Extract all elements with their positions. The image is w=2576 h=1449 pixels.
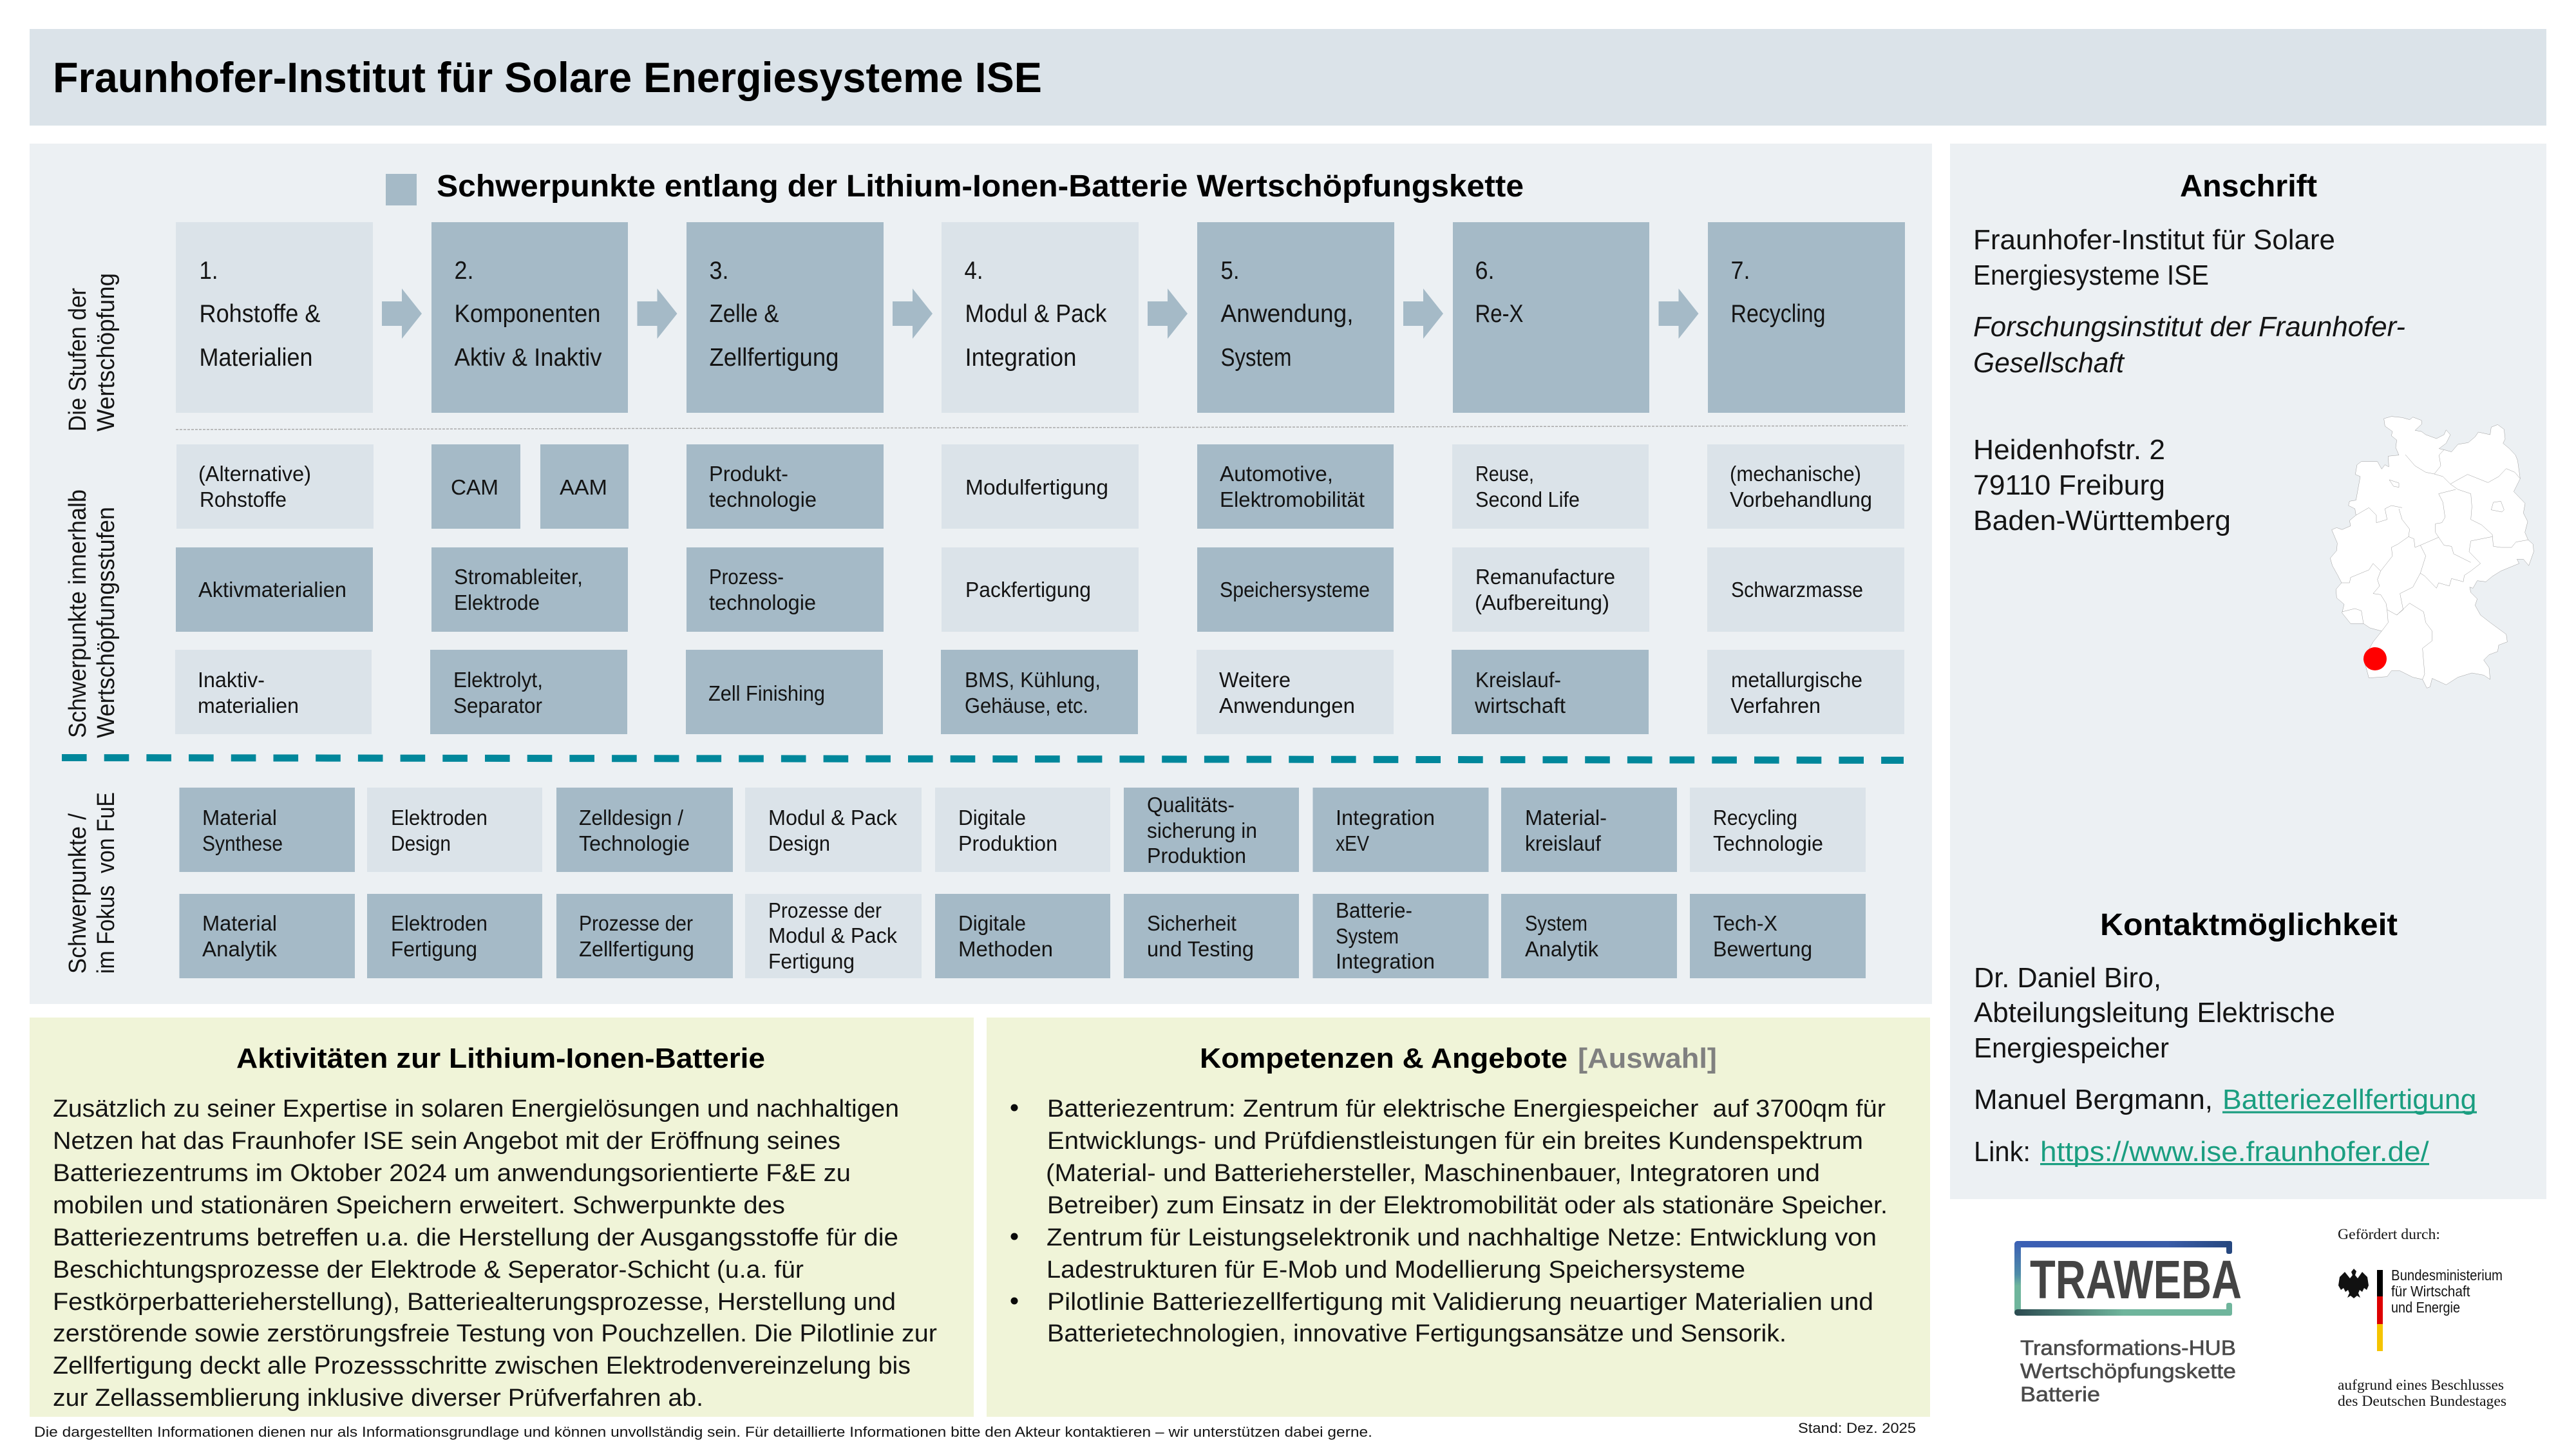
arrow 6 xyxy=(1659,289,1699,339)
row label: research focus: im Fokus von FuE xyxy=(93,792,120,974)
box: Speichersysteme xyxy=(1197,547,1394,632)
text block: second contact: Batteriezellfertigung xyxy=(2222,1084,2477,1115)
text block: institute description: Gesellschaft xyxy=(1973,347,2125,379)
arrow 5 xyxy=(1403,289,1443,339)
box: Materialkreislauf: kreislauf xyxy=(1525,831,1602,855)
heading: Kompetenzen: [Auswahl] xyxy=(1578,1043,1717,1074)
box: metallurgische Verfahren: Verfahren xyxy=(1730,694,1821,717)
logo: TRAWEBA xyxy=(2014,1241,2242,1406)
box: Digitale Produktion: Digitale xyxy=(958,806,1026,829)
box: Reuse: Second Life xyxy=(1475,488,1580,511)
box: Weitere Anwendungen xyxy=(1197,650,1394,734)
box: Materialkreislauf xyxy=(1501,788,1677,872)
box: Digitale Methoden xyxy=(935,894,1110,978)
logo: TRAWEBA: Wertschöpfungskette xyxy=(2020,1359,2236,1383)
stage 7: Recycling xyxy=(1731,300,1825,328)
flag bar xyxy=(2377,1270,2383,1351)
box: Material Synthese: Synthese xyxy=(202,831,283,855)
stage 1: Materialien xyxy=(200,344,313,372)
box: Kreislaufwirtschaft: wirtschaft xyxy=(1474,694,1566,717)
box: Zell Finishing: Zell Finishing xyxy=(708,681,825,705)
box: Inaktivmaterialien: materialien xyxy=(198,694,299,717)
box: Kreislaufwirtschaft: Kreislauf- xyxy=(1475,668,1561,692)
title banner xyxy=(30,29,2546,126)
heading: Aktivitäten: Aktivitäten zur Lithium-Ionen-Batterie xyxy=(236,1043,765,1074)
text block: Aktivitäten: zerstörende sowie zerstörungsfreie Testung von Pouchzellen. Die Pilotlinie zur xyxy=(53,1320,937,1347)
box: Stromableiter: Stromableiter, xyxy=(454,565,583,589)
box: Digitale Produktion xyxy=(935,788,1110,872)
box: Tech-X Bewertung: Tech-X xyxy=(1713,911,1777,935)
box: Batterie-System Integration: System xyxy=(1336,924,1399,948)
heading: Kontaktmöglichkeit: Kontaktmöglichkeit xyxy=(2100,908,2398,942)
box: Material Analytik: Material xyxy=(202,911,277,935)
box: Automotive: Elektromobilität xyxy=(1220,488,1365,511)
box: Produkttechnologie xyxy=(687,444,884,529)
box: BMS: BMS, Kühlung, xyxy=(965,668,1101,692)
logo: Bundesministerium: Gefördert durch: xyxy=(2338,1226,2440,1242)
text block: Aktivitäten: mobilen und stationären Speichern erweitert. Schwerpunkte des xyxy=(53,1192,785,1219)
text block: Aktivitäten: Batteriezentrums im Oktober 2024 um anwendungsorientierte F&E zu xyxy=(53,1160,851,1187)
stage 5: Anwendung, xyxy=(1221,300,1354,328)
panel heading: value chain: Schwerpunkte entlang der Lithium-Ionen-Batterie Wertschöpfungskette xyxy=(437,169,1524,204)
box: Kreislaufwirtschaft xyxy=(1452,650,1649,734)
row label: focus within stages: Wertschöpfungsstufen xyxy=(93,507,120,738)
box: Integration xEV: Integration xyxy=(1336,806,1435,829)
box: Zelldesign: Zelldesign / xyxy=(579,806,684,829)
logo: Bundesministerium: des Deutschen Bundestages xyxy=(2338,1393,2506,1409)
box: Sicherheit und Testing: und Testing xyxy=(1147,937,1254,961)
stage 3: Zellfertigung xyxy=(710,344,838,372)
box: Vorbehandlung: Vorbehandlung xyxy=(1730,488,1872,511)
panel: Kompetenzen xyxy=(987,1018,1930,1417)
box: Elektroden Design: Elektroden xyxy=(391,806,488,829)
stage 5: 5. xyxy=(1221,257,1239,285)
box: Elektroden Design xyxy=(367,788,542,872)
box: BMS: Gehäuse, etc. xyxy=(965,694,1088,717)
map: Germany with location marker xyxy=(2330,417,2533,688)
box: Automotive: Automotive, xyxy=(1220,462,1333,486)
text block: Aktivitäten: Batteriezentrums betreffen u.a. die Herstellung der Ausgangsstoffe für die xyxy=(53,1224,898,1251)
arrow 3 xyxy=(893,289,933,339)
box: Tech-X Bewertung xyxy=(1690,894,1866,978)
box: Prozesse Modul Pack: Modul & Pack xyxy=(768,923,897,947)
box: CAM: CAM xyxy=(451,475,498,499)
text block: Aktivitäten: Zellfertigung deckt alle Prozessschritte zwischen Elektrodenvereinzelung bis xyxy=(53,1352,911,1379)
text block: institute name xyxy=(1973,224,2335,291)
box: Integration xEV xyxy=(1312,788,1489,872)
box: Recycling Technologie xyxy=(1690,788,1866,872)
row label: stages: Die Stufen der xyxy=(64,288,91,431)
box: Zell Finishing xyxy=(686,650,883,734)
text block: Aktivitäten: zur Zellassemblierung inklusive diverser Prüfverfahren ab. xyxy=(53,1385,703,1412)
box: Elektroden Fertigung xyxy=(367,894,542,978)
box: Prozesstechnologie: technologie xyxy=(709,591,816,614)
stage 3: 3. xyxy=(710,257,729,285)
box: Modul Pack Design: Modul & Pack xyxy=(768,806,897,829)
box: AAM xyxy=(540,444,629,529)
box: Vorbehandlung: (mechanische) xyxy=(1730,462,1861,486)
box: Material Analytik xyxy=(179,894,355,978)
text block: contact person xyxy=(1974,962,2335,1064)
box: Prozesse Modul Pack xyxy=(745,894,922,978)
box: CAM xyxy=(431,444,520,529)
panel: Aktivitäten xyxy=(30,1018,974,1417)
heading: Kompetenzen: Kompetenzen & Angebote xyxy=(1200,1043,1567,1074)
box: Alternative Rohstoffe: Rohstoffe xyxy=(200,488,287,511)
box: Modul Pack Design xyxy=(745,788,922,872)
arrow 2 xyxy=(638,289,677,339)
box: Material Synthese: Material xyxy=(202,806,277,829)
box: Sicherheit und Testing: Sicherheit xyxy=(1147,911,1236,935)
box: Prozesse der Zellfertigung xyxy=(556,894,733,978)
heading: Kompetenzen xyxy=(1200,1043,1717,1074)
text block: link: https://www.ise.fraunhofer.de/ xyxy=(2040,1136,2429,1168)
box: Automotive xyxy=(1197,444,1394,529)
box: BMS xyxy=(941,650,1138,734)
box: Weitere Anwendungen: Weitere xyxy=(1219,668,1291,692)
row label: research focus xyxy=(64,792,120,974)
text block: contact person: Energiespeicher xyxy=(1974,1032,2169,1064)
box: Elektrolyt xyxy=(430,650,627,734)
row label: stages xyxy=(64,273,120,431)
box: Alternative Rohstoffe xyxy=(176,444,374,529)
logo: Bundesministerium: aufgrund eines Beschlusses xyxy=(2338,1377,2504,1393)
footnote: disclaimer: Die dargestellten Informationen dienen nur als Informationsgrundlage und können unvollständig sein. Für detaillierte Informationen bitte den Akteur kontaktieren – wir unterstützen dabei gerne. xyxy=(34,1424,1372,1440)
box: Zelldesign: Technologie xyxy=(579,831,690,855)
box: Prozesse Modul Pack: Prozesse der xyxy=(768,898,882,922)
bullet list: Kompetenzen: (Material- und Batteriehersteller, Maschinenbauer, Integratoren und xyxy=(1046,1160,1820,1187)
stage 2 xyxy=(431,222,628,413)
box: Inaktivmaterialien xyxy=(175,650,372,734)
text block: Aktivitäten: Festkörperbatterieherstellung), Batteriealterungsprozesse, Herstellung und xyxy=(53,1289,896,1316)
box: Sicherheit und Testing xyxy=(1124,894,1299,978)
box: Reuse: Reuse, xyxy=(1475,462,1534,486)
stage 2: Aktiv & Inaktiv xyxy=(455,344,602,372)
stage 1 xyxy=(176,222,373,413)
stage 4: 4. xyxy=(965,257,983,285)
box: Stromableiter: Elektrode xyxy=(454,591,540,614)
box: Reuse xyxy=(1452,444,1649,529)
box: Elektroden Design: Design xyxy=(391,831,451,855)
row label: focus within stages xyxy=(64,489,120,738)
stage 6: 6. xyxy=(1475,257,1494,285)
icon: federal eagle xyxy=(2338,1269,2369,1298)
bullet list: Kompetenzen: Batteriezentrum: Zentrum für elektrische Energiespeicher auf 3700qm für xyxy=(1047,1095,1886,1122)
box: System Analytik xyxy=(1501,894,1677,978)
box: Qualitätssicherung: Produktion xyxy=(1147,844,1246,867)
box: Batterie-System Integration xyxy=(1312,894,1489,978)
bullet list: Kompetenzen: Ladestrukturen für E-Mob und Modellierung Speichersysteme xyxy=(1046,1256,1745,1283)
box: Prozesstechnologie xyxy=(687,547,884,632)
box: Modul Pack Design: Design xyxy=(768,831,830,855)
text block: Aktivitäten xyxy=(53,1095,937,1412)
box: Prozesse der Zellfertigung: Zellfertigung xyxy=(579,937,694,961)
row label: stages: Wertschöpfung xyxy=(93,273,120,431)
panel: value chain xyxy=(30,144,1932,1004)
heading: Anschrift: Anschrift xyxy=(2180,169,2317,204)
box: Modulfertigung: Modulfertigung xyxy=(965,475,1108,499)
stage 6: Re-X xyxy=(1475,300,1524,328)
box: Integration xEV: xEV xyxy=(1336,831,1369,855)
stage 7: 7. xyxy=(1731,257,1750,285)
stage 1: 1. xyxy=(200,257,218,285)
box: Qualitätssicherung xyxy=(1124,788,1299,872)
text block: Aktivitäten: Netzen hat das Fraunhofer ISE sein Angebot mit der Eröffnung seines xyxy=(53,1128,840,1155)
text block: institute name: Fraunhofer-Institut für Solare xyxy=(1973,224,2335,256)
box: Schwarzmasse xyxy=(1707,547,1904,632)
text block: institute name: Energiesysteme ISE xyxy=(1973,260,2209,291)
row label: focus within stages: Schwerpunkte innerhalb xyxy=(64,489,91,738)
box: Remanufacture xyxy=(1452,547,1649,632)
bullet list: Kompetenzen: Entwicklungs- und Prüfdienstleistungen für ein breites Kundenspektrum xyxy=(1047,1128,1863,1155)
box: Elektrolyt: Elektrolyt, xyxy=(453,668,543,692)
box: Materialkreislauf: Material- xyxy=(1525,806,1607,829)
box: System Analytik: Analytik xyxy=(1525,937,1598,961)
bullet list: Kompetenzen xyxy=(1011,1095,1888,1347)
text block: institute description: Forschungsinstitut der Fraunhofer- xyxy=(1973,311,2405,343)
text block: institute description xyxy=(1973,311,2405,379)
box: Elektroden Fertigung: Elektroden xyxy=(391,911,488,935)
box: System Analytik: System xyxy=(1525,911,1587,935)
box: Zelldesign xyxy=(556,788,733,872)
box: Batterie-System Integration: Batterie- xyxy=(1336,898,1412,922)
bullet list: Kompetenzen: Betreiber) zum Einsatz in der Elektromobilität oder als stationäre Speicher. xyxy=(1047,1192,1888,1219)
box: Packfertigung xyxy=(942,547,1139,632)
bullet list: Kompetenzen: Pilotlinie Batteriezellfertigung mit Validierung neuartiger Materialien und xyxy=(1047,1289,1873,1316)
text block: address: Baden-Württemberg xyxy=(1973,505,2231,536)
box: Prozesse der Zellfertigung: Prozesse der xyxy=(579,911,693,935)
box: Batterie-System Integration: Integration xyxy=(1336,949,1435,973)
box: Inaktivmaterialien: Inaktiv- xyxy=(198,668,265,692)
stage 5: System xyxy=(1221,344,1292,372)
stage 4: Integration xyxy=(965,344,1077,372)
box: Aktivmaterialien xyxy=(176,547,373,632)
stage 1: Rohstoffe & xyxy=(200,300,321,328)
panel: address and contact xyxy=(1950,144,2546,1199)
box: Prozesse Modul Pack: Fertigung xyxy=(768,949,855,973)
box: Aktivmaterialien: Aktivmaterialien xyxy=(198,578,346,601)
box: Modulfertigung xyxy=(942,444,1139,529)
box: Digitale Produktion: Produktion xyxy=(958,831,1057,855)
box: Qualitätssicherung: Qualitäts- xyxy=(1147,793,1235,817)
logo: Bundesministerium: Bundesministerium xyxy=(2391,1267,2503,1283)
stage 4 xyxy=(942,222,1139,413)
text block: contact person: Dr. Daniel Biro, xyxy=(1974,962,2161,994)
logo: TRAWEBA: Batterie xyxy=(2020,1383,2100,1406)
box: metallurgische Verfahren xyxy=(1707,650,1904,734)
stage 7 xyxy=(1708,222,1905,413)
logo: Bundesministerium: und Energie xyxy=(2391,1299,2460,1316)
row label: research focus: Schwerpunkte / xyxy=(64,813,91,974)
stage 3 xyxy=(687,222,884,413)
arrow 4 xyxy=(1148,289,1188,339)
logo: TRAWEBA: TRAWEBA xyxy=(2030,1249,2242,1310)
box: Prozesstechnologie: Prozess- xyxy=(709,565,784,589)
box: Produkttechnologie: technologie xyxy=(709,488,817,511)
stage 4: Modul & Pack xyxy=(965,300,1107,328)
box: Digitale Methoden: Digitale xyxy=(958,911,1026,935)
text block: link: Link: xyxy=(1974,1136,2031,1168)
box: Material Synthese xyxy=(179,788,355,872)
text block: address xyxy=(1973,434,2231,536)
logo: TRAWEBA: Transformations-HUB xyxy=(2020,1336,2236,1359)
box: Recycling Technologie: Recycling xyxy=(1713,806,1797,829)
box: Elektroden Fertigung: Fertigung xyxy=(391,937,477,961)
box: Speichersysteme: Speichersysteme xyxy=(1220,578,1370,601)
box: Qualitätssicherung: sicherung in xyxy=(1147,819,1257,842)
bullet list: Kompetenzen: Batterietechnologien, innovative Fertigungsansätze und Sensorik. xyxy=(1047,1320,1786,1347)
box: Packfertigung: Packfertigung xyxy=(965,578,1091,601)
text block: address: 79110 Freiburg xyxy=(1973,469,2165,501)
box: Remanufacture: Remanufacture xyxy=(1475,565,1615,589)
box: Digitale Methoden: Methoden xyxy=(958,937,1053,961)
text block: Aktivitäten: Beschichtungsprozesse der Elektrode & Seperator-Schicht (u.a. für xyxy=(53,1256,804,1283)
text block: second contact xyxy=(1974,1084,2477,1115)
box: Produkttechnologie: Produkt- xyxy=(709,462,788,486)
text block: second contact: Manuel Bergmann, xyxy=(1974,1084,2213,1115)
text block: address: Heidenhofstr. 2 xyxy=(1973,434,2165,466)
box: Schwarzmasse: Schwarzmasse xyxy=(1731,578,1863,601)
box: Elektrolyt: Separator xyxy=(453,694,542,717)
stage 2: Komponenten xyxy=(455,300,600,328)
box: Weitere Anwendungen: Anwendungen xyxy=(1219,694,1355,717)
box: metallurgische Verfahren: metallurgische xyxy=(1731,668,1862,692)
bullet list: Kompetenzen: Zentrum für Leistungselektronik und nachhaltige Netze: Entwicklung von xyxy=(1046,1224,1877,1251)
box: Alternative Rohstoffe: (Alternative) xyxy=(198,462,311,486)
box: Stromableiter xyxy=(431,547,628,632)
logo: Bundesministerium: für Wirtschaft xyxy=(2391,1283,2470,1300)
box: Vorbehandlung xyxy=(1707,444,1904,529)
title banner: Fraunhofer-Institut für Solare Energiesysteme ISE xyxy=(53,53,1042,101)
box: Material Analytik: Analytik xyxy=(202,937,277,961)
stage 5 xyxy=(1197,222,1394,413)
arrow 1 xyxy=(382,289,422,339)
box: Tech-X Bewertung: Bewertung xyxy=(1713,937,1812,961)
box: Recycling Technologie: Technologie xyxy=(1713,831,1823,855)
footnote: date: Stand: Dez. 2025 xyxy=(1798,1420,1916,1436)
text block: Aktivitäten: Zusätzlich zu seiner Expertise in solaren Energielösungen und nachhaltigen xyxy=(53,1095,899,1122)
stage 3: Zelle & xyxy=(710,300,779,328)
box: Remanufacture: (Aufbereitung) xyxy=(1475,591,1609,614)
logo: Bundesministerium xyxy=(2338,1226,2506,1409)
stage 2: 2. xyxy=(455,257,474,285)
text block: contact person: Abteilungsleitung Elektrische xyxy=(1974,997,2335,1028)
box: AAM: AAM xyxy=(560,475,607,499)
stage 6 xyxy=(1453,222,1649,413)
